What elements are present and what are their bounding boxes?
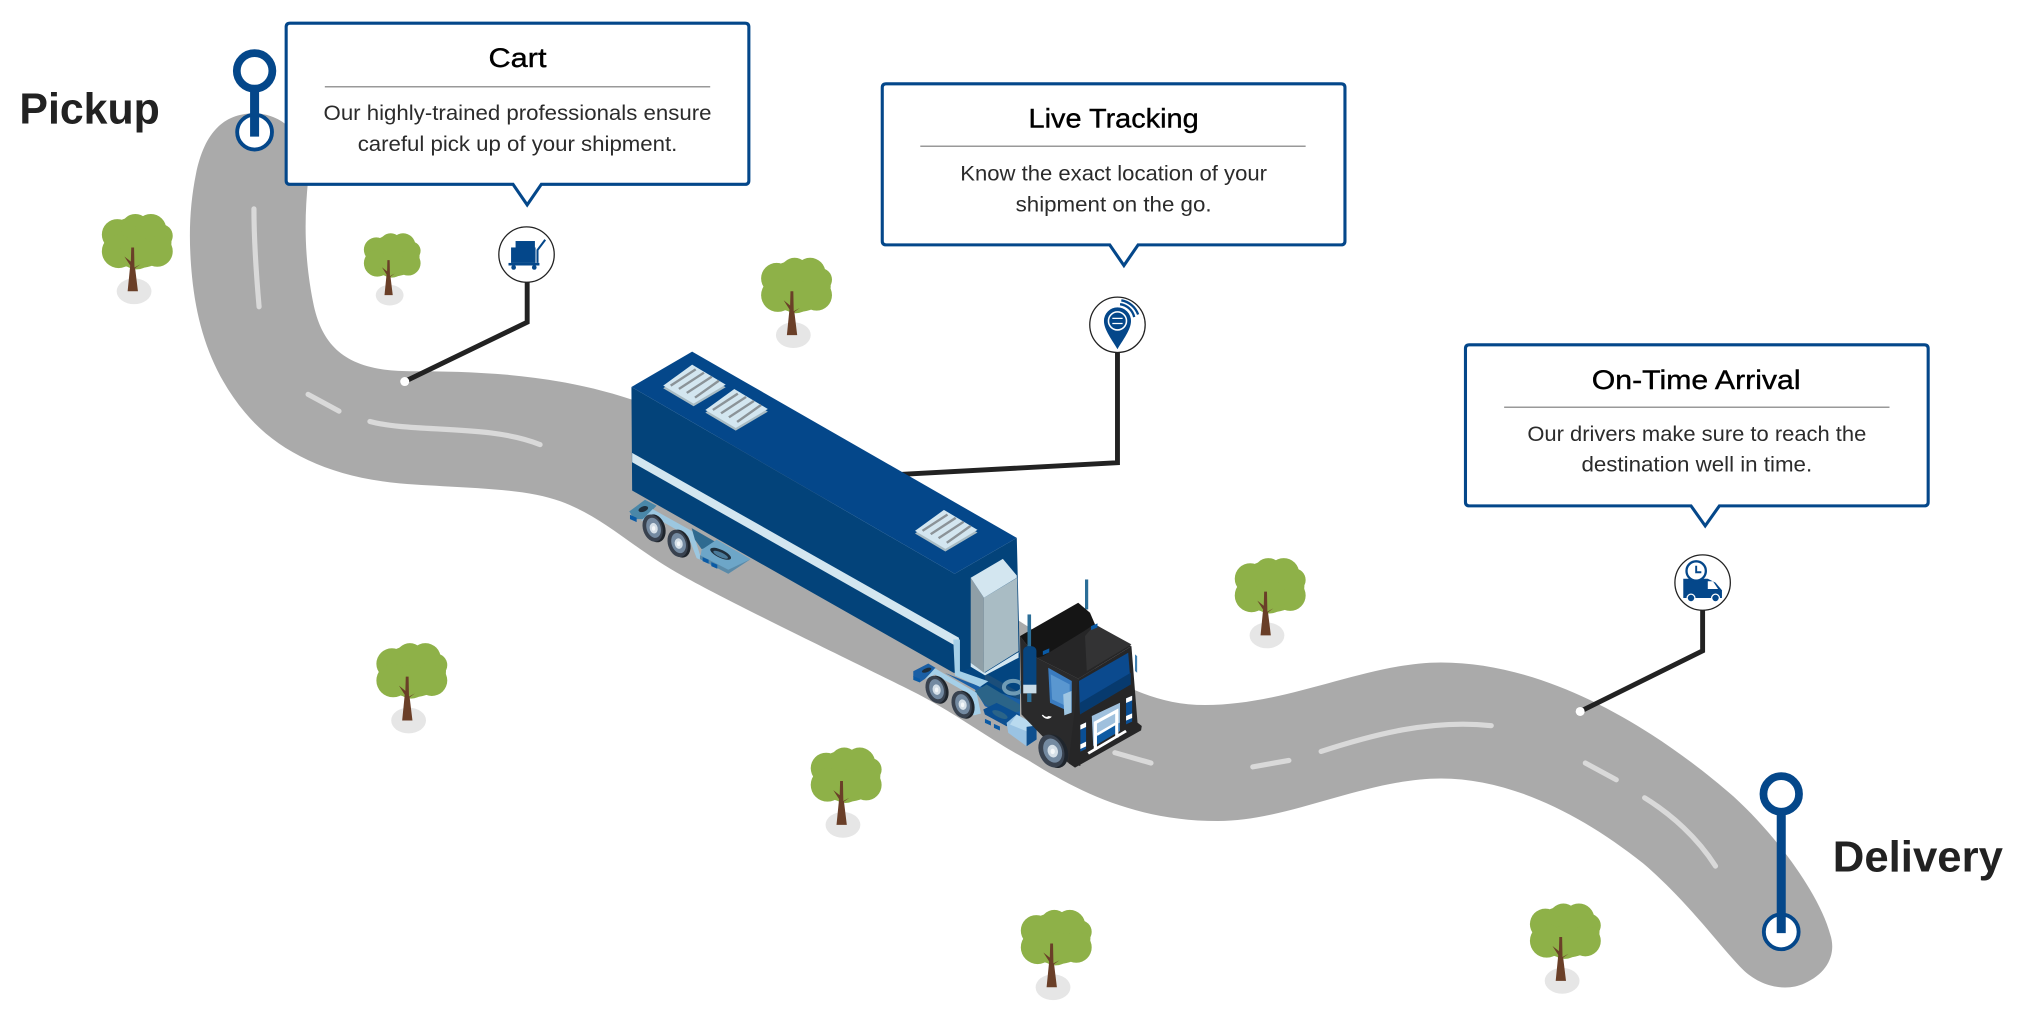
tree 4 [1235, 558, 1306, 648]
tree 1 [102, 214, 173, 304]
delivery pin [1763, 776, 1799, 949]
icon: cart [499, 227, 554, 282]
description: cart: careful pick up of your shipment. [358, 132, 677, 156]
title: on-time arrival: On-Time Arrival [1592, 365, 1801, 395]
pickup pin [237, 53, 272, 150]
truck [631, 352, 1020, 674]
front axle [913, 640, 1037, 746]
refrigeration unit [971, 559, 1019, 675]
panel: on-time arrival [1465, 345, 1928, 526]
exhaust stack [1023, 614, 1036, 702]
description: on-time arrival: Our drivers make sure to reach the [1527, 422, 1866, 446]
title: live tracking: Live Tracking [1029, 104, 1199, 134]
tree 7 [1021, 910, 1092, 1000]
rear axle [629, 500, 751, 574]
trailer roof vents [663, 365, 977, 551]
road [190, 113, 1832, 987]
trailer [631, 352, 1020, 674]
description: live tracking: Know the exact location of your [960, 161, 1267, 185]
heading: pickup: Pickup [19, 85, 160, 134]
description: cart: Our highly-trained professionals ensure [324, 101, 711, 125]
tree 5 [376, 643, 447, 733]
connector: on-time arrival [1580, 608, 1703, 711]
tractor unit [971, 559, 1142, 771]
tree 2 [364, 233, 421, 305]
heading: delivery: Delivery [1833, 832, 2004, 881]
tree 3 [761, 258, 832, 348]
route point: cart [400, 377, 409, 386]
icon: location pin [1090, 297, 1145, 353]
title: cart: Cart [489, 43, 547, 73]
description: on-time arrival: destination well in time. [1581, 453, 1812, 477]
cab [1020, 579, 1142, 771]
connector: live tracking [902, 351, 1117, 474]
description: live tracking: shipment on the go. [1016, 192, 1212, 216]
route point: on-time arrival [1576, 707, 1585, 716]
tree 8 [1530, 903, 1601, 994]
tree 6 [811, 748, 882, 838]
connector: cart [405, 280, 527, 382]
icon: delivery truck with clock [1675, 555, 1730, 610]
panel: live tracking [882, 84, 1345, 266]
panel: cart [286, 23, 749, 205]
